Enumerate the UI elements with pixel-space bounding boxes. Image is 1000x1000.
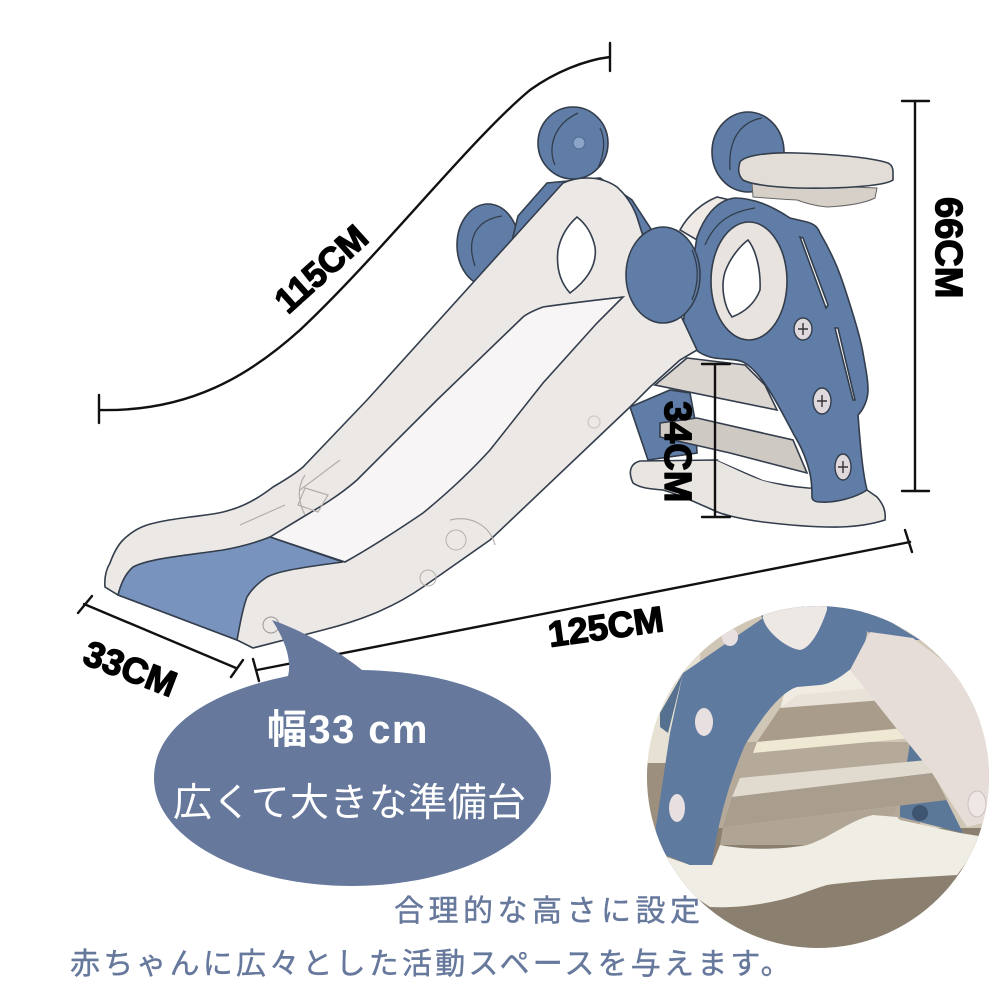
caption line 2: 赤ちゃんに広々とした活動スペースを与えます。 [70,948,794,981]
base [630,460,885,527]
caption line 1: 合理的な高さに設定 [394,895,704,928]
side slots [800,237,855,400]
upper step [780,688,874,708]
slide bed [105,178,697,648]
cream background behind upper step [780,670,874,708]
basketball hoop [739,153,893,207]
screws [794,318,851,480]
callout bubble [154,620,551,886]
lower step [732,760,933,797]
white ring inside frame [763,606,827,650]
window ring [711,222,787,340]
ladder steps [655,358,807,473]
screws [722,628,738,646]
dimension: 34CM: 34CM [656,401,698,502]
window opening [723,240,760,317]
blue foot [118,537,343,640]
dimension: 34CM [656,364,730,517]
slide side [850,632,995,827]
dimension: 66CM [902,101,969,491]
rear leg [630,390,697,460]
dimension: 125CM: 125CM [545,598,666,655]
callout text line 2: 広くて大きな準備台 [173,782,526,825]
base [667,815,985,907]
dimension: 115CM: 115CM [267,218,376,321]
dimension: 115CM [99,43,610,423]
white gap under steps [717,460,808,486]
inset photo of ladder [640,600,1000,950]
front frame [683,112,868,502]
porthole [558,217,595,293]
rear arm of slide [680,197,730,240]
dimension: 125CM [253,530,912,681]
dimension: 33CM: 33CM [78,632,182,705]
rear blue band [660,673,683,733]
callout text line 1: 幅33 cm [267,708,429,752]
slide product illustration [105,107,893,648]
blue ear [858,610,920,640]
wall and floor [640,600,1000,950]
rear blue foot [900,743,963,833]
blue frame [655,600,867,865]
front ear [626,227,700,323]
caption [70,895,794,981]
bubble shape [154,620,551,886]
rear ears [457,107,653,290]
dimension: 66CM: 66CM [927,197,969,298]
chute [270,297,623,562]
moulded details [240,460,495,545]
dimension: 33CM [78,596,243,705]
